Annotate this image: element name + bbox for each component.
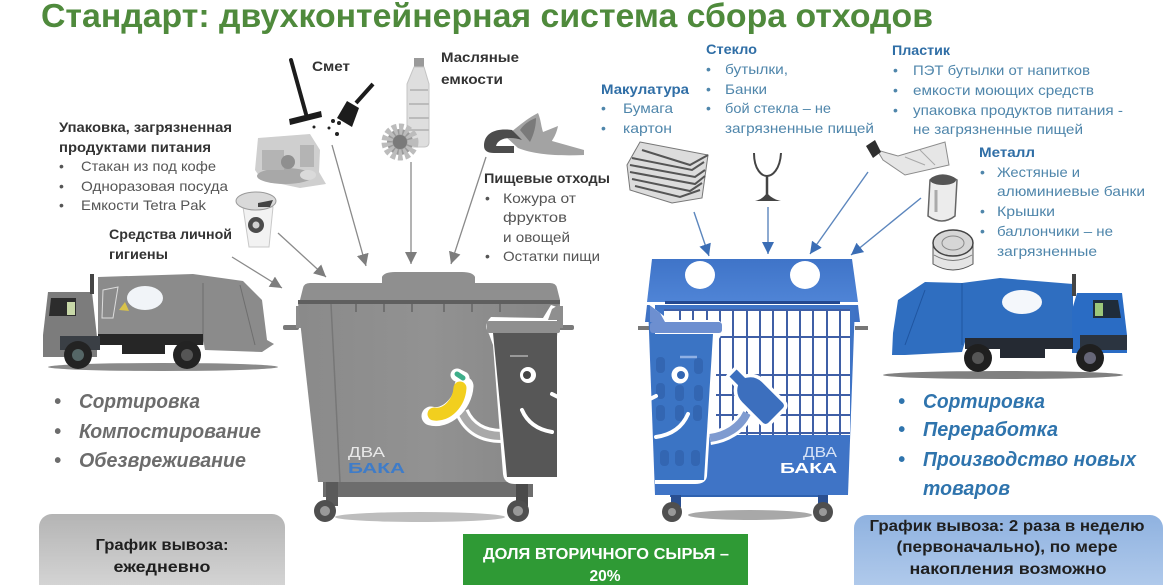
label: sweepings: Смет [312,58,350,74]
label: hygiene products: Средства личной [109,226,232,242]
panel: grey stream labels [59,49,610,264]
list: blue stream processing [898,391,1137,500]
icon: oil bottle and sunflower [387,58,429,155]
label: metal: Жестяные и [997,164,1080,180]
list: blue stream processing: Переработка [923,419,1058,441]
label: packaging: продуктами питания [59,139,211,155]
label: glass: • [706,61,711,77]
list: blue stream processing: Сортировка [923,391,1045,413]
label: packaging [59,119,232,213]
grey garbage truck [43,274,278,371]
label: packaging: • [59,158,64,174]
banana character [431,374,464,417]
label: metal: алюминиевые банки [997,183,1145,199]
mini bin character [648,304,724,484]
label: glass: • [706,81,711,97]
lid with holes [647,259,858,302]
list: grey stream processing [54,391,261,472]
list: grey stream processing: • [54,391,61,413]
label: packaging: Стакан из под кофе [81,158,216,174]
list: grey stream processing: • [54,421,61,443]
panel: blue schedule [854,515,1163,585]
label: glass: бой стекла – не [725,100,831,116]
panel: grey schedule: График вывоза: [96,537,228,554]
panel: blue schedule: График вывоза: 2 раза в неделю [870,518,1144,535]
label: food waste [484,170,610,264]
label: packaging: • [59,178,64,194]
list: blue stream processing: • [898,419,905,441]
list: blue stream processing: • [898,391,905,413]
logo: БАКА [780,460,837,477]
label: paper: • [601,100,606,116]
label: metal: Металл [979,144,1035,160]
label: food waste: фруктов [503,209,567,225]
label: packaging: Емкости Tetra Pak [81,197,207,213]
label: plastic [892,42,1123,137]
icon: crushed plastic bottle [866,140,949,175]
label: paper: • [601,120,606,136]
icon: broom and scoop [289,60,373,136]
blue container [638,259,868,522]
label: metal: • [980,164,985,180]
logo: БАКА [348,460,405,477]
panel: grey schedule [39,514,285,585]
logo [348,444,405,477]
list: blue stream processing: товаров [923,478,1010,500]
list: blue stream processing: Производство новых [923,449,1137,471]
panel: secondary raw material share: 20% [589,568,621,585]
icon: tin can [928,175,957,221]
panel: grey schedule: ежедневно [114,559,210,576]
logo: ДВА [348,444,385,461]
bottle character [723,363,785,425]
lid [300,272,560,300]
mini bin character [486,304,560,484]
wire mesh [664,310,850,435]
label: food waste: и овощей [503,229,570,245]
wheels and base [662,485,833,522]
label: food waste: Кожура от [503,190,577,206]
label: plastic: емкости моющих средств [913,82,1094,98]
panel: secondary raw material share [463,534,748,585]
list: grey stream processing: • [54,450,61,472]
icon: food can [933,230,973,270]
panel: blue stream labels [601,41,1145,259]
label: paper: Макулатура [601,81,689,97]
label: plastic: Пластик [892,42,951,58]
label: plastic: • [893,82,898,98]
label: plastic: • [893,62,898,78]
label: metal: • [980,223,985,239]
label: hygiene products [109,226,232,262]
label: food waste: • [485,248,490,264]
icon: wine glass [754,153,781,201]
logo: ДВА [803,444,837,461]
arm [710,413,747,438]
panel: blue schedule: накопления возможно [910,561,1106,578]
label: glass [706,41,874,136]
label: glass: • [706,100,711,116]
label: plastic: ПЭТ бутылки от напитков [913,62,1090,78]
grey container [283,272,574,522]
label: plastic: не загрязненные пищей [913,121,1083,137]
panel: blue schedule: (первоначально), по мере [896,539,1118,556]
icon: banana peel [484,113,584,155]
label: plastic: упаковка продуктов питания - [913,102,1123,118]
label: food waste: Пищевые отходы [484,170,610,186]
label: packaging: Одноразовая посуда [81,178,228,194]
arrows: blue stream [694,172,921,256]
label: packaging: • [59,197,64,213]
label: metal: Крышки [997,203,1055,219]
label: metal: баллончики – не [997,223,1113,239]
label: glass: бутылки, [725,61,788,77]
label: glass: загрязненные пищей [725,120,874,136]
label: paper [601,81,689,136]
list: grey stream processing: Сортировка [79,391,200,413]
label: metal: • [980,203,985,219]
label: oil containers: емкости [441,71,503,87]
logo [780,444,837,477]
label: metal: загрязненные [997,243,1097,259]
label: oil containers: Масляные [441,49,519,65]
label: paper: картон [623,120,672,136]
panel: secondary raw material share: ДОЛЯ ВТОРИЧНОГО СЫРЬЯ – [483,546,729,563]
label: plastic: • [893,102,898,118]
icon: paper stack [627,142,708,203]
label: glass: Стекло [706,41,757,57]
label: hygiene products: гигиены [109,246,168,262]
label: paper: Бумага [623,100,673,116]
label: food waste: • [485,190,490,206]
label: metal [979,144,1145,259]
arm [462,412,502,436]
label: food waste: Остатки пищи [503,248,600,264]
list: grey stream processing: Обезвреживание [79,450,246,472]
list: blue stream processing: • [898,449,905,471]
label: packaging: Упаковка, загрязненная [59,119,232,135]
label: glass: Банки [725,81,767,97]
arrows: grey stream [232,145,486,288]
blue garbage truck [883,274,1127,379]
label: oil containers [441,49,519,87]
list: grey stream processing: Компостирование [79,421,261,443]
icon: disposable dishes [255,134,326,188]
icon: coffee cup [236,192,276,247]
wheels and base [314,482,533,522]
